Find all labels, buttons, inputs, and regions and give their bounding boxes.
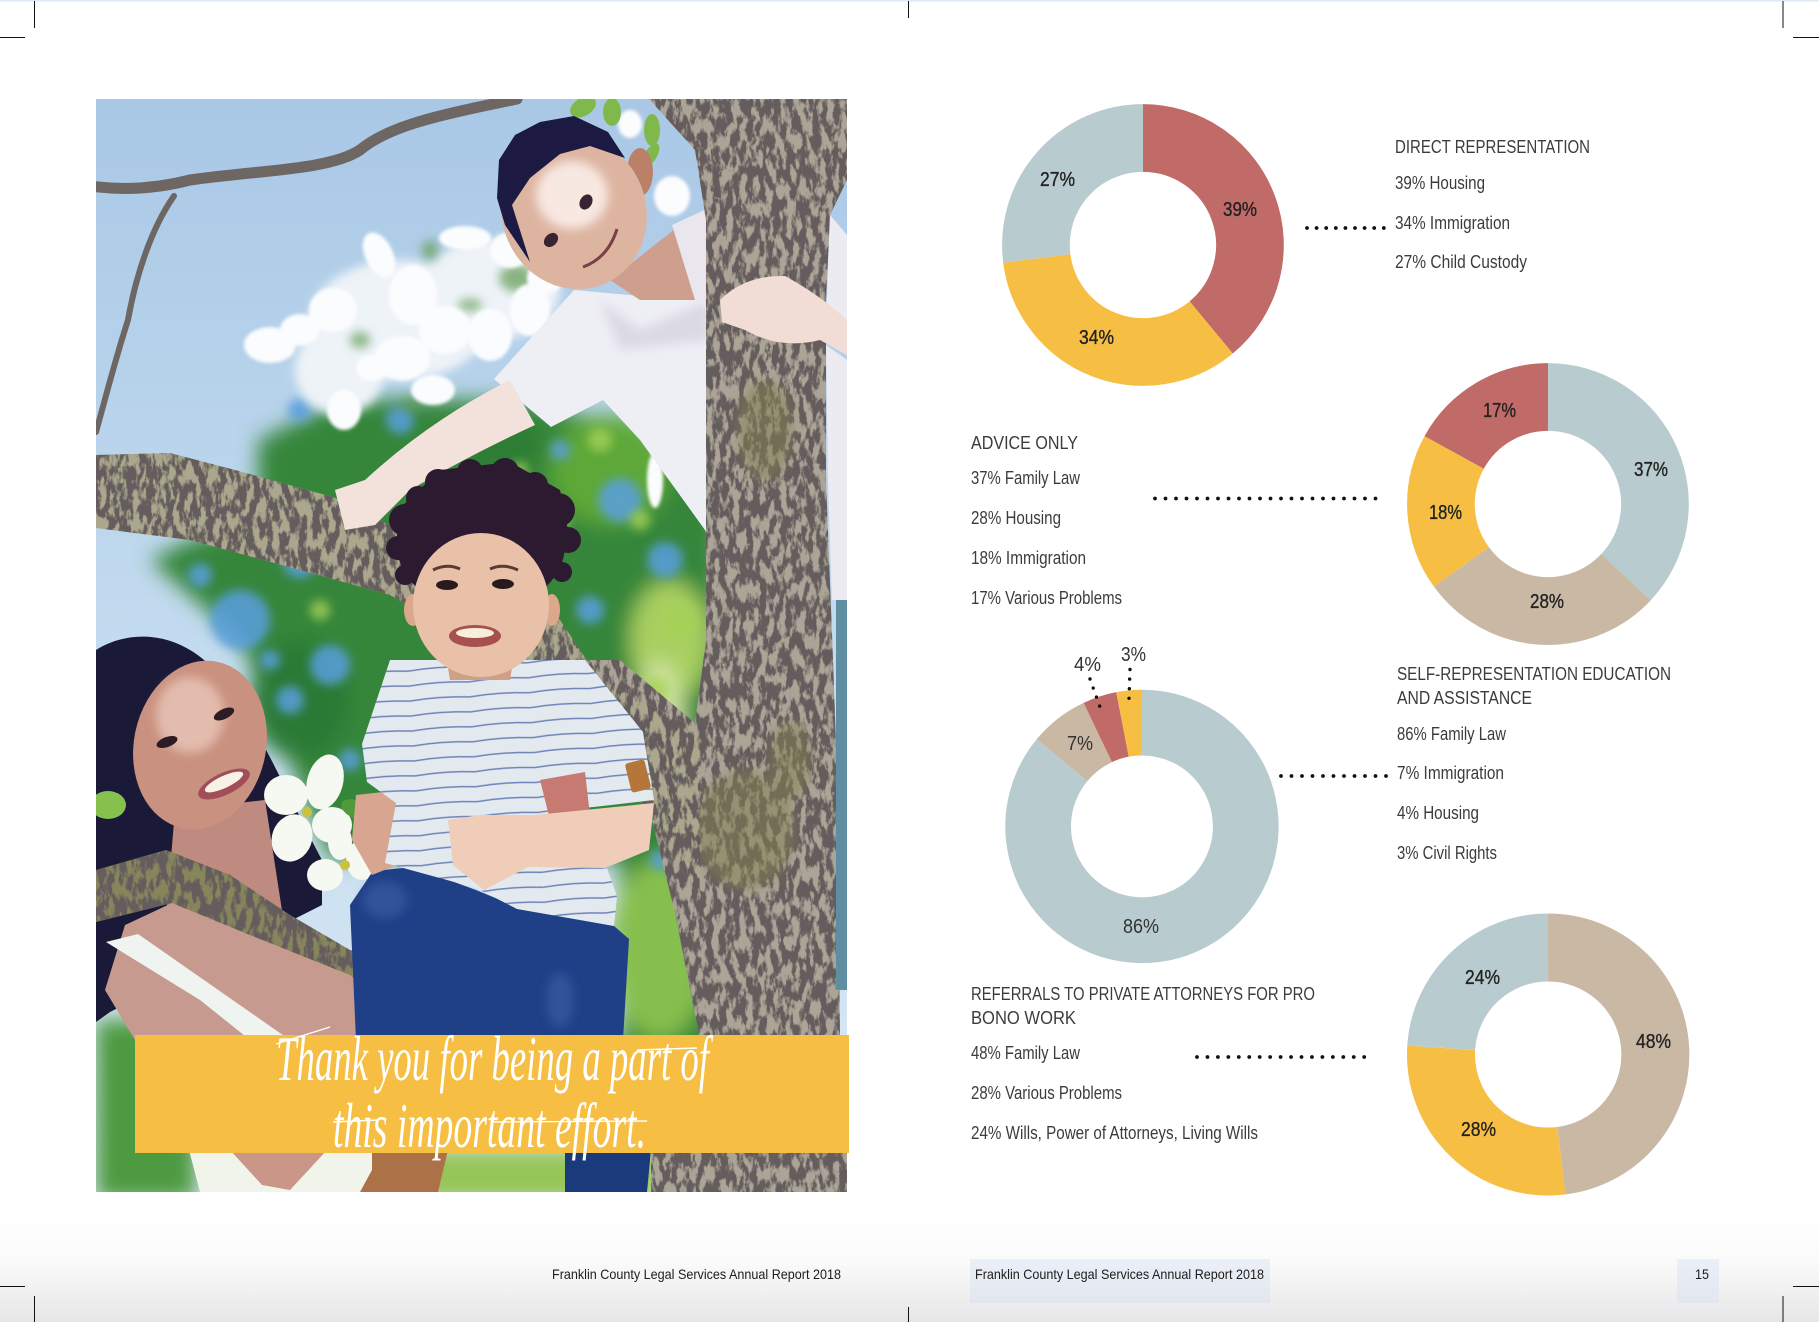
flower centre two: [340, 860, 350, 870]
callout banner: [135, 1023, 849, 1161]
boy: hand on trunk: [720, 276, 847, 355]
text block: direct representation: [1395, 137, 1590, 272]
donut labels: referrals: 48%: [1636, 1031, 1671, 1053]
text block: self-representation: [1397, 664, 1671, 863]
blossom soft mass: [295, 240, 560, 415]
text block: advice only: 28% Housing: [971, 508, 1061, 528]
toddler: arm and hand: [448, 803, 654, 890]
footer text left page: Franklin County Legal Services Annual Report 2018: [552, 1266, 841, 1282]
donut labels: direct representation: 39%: [1223, 199, 1257, 221]
thank-you script line two: this important effort.: [333, 1090, 646, 1161]
script flourishes: [276, 1027, 697, 1122]
toddler: hair: [386, 458, 581, 585]
text block: referrals: BONO WORK: [971, 1008, 1076, 1028]
light green bokeh: [310, 428, 698, 704]
toddler: eyes, brows, mouth: [433, 566, 518, 647]
text block: advice only: ADVICE ONLY: [971, 433, 1078, 453]
text block: self-representation: SELF-REPRESENTATION EDUCATION: [1397, 664, 1671, 684]
leaves near top: [570, 99, 660, 164]
toddler: sleeve tab: [625, 759, 651, 793]
banner rectangle: [135, 1035, 849, 1153]
top edge line: [0, 0, 1819, 2]
footer tab right page: [970, 1259, 1270, 1303]
toddler: pants below banner: [565, 1150, 651, 1192]
donut labels: referrals: 28%: [1461, 1119, 1496, 1141]
donut labels: self-representation: 3%: [1121, 644, 1146, 666]
boy: shirt right of trunk: [826, 215, 847, 600]
donut labels: advice only: 37%: [1634, 459, 1668, 481]
donut labels: advice only: [1429, 400, 1668, 613]
text block: advice only: 18% Immigration: [971, 548, 1086, 568]
text block: advice only: 37% Family Law: [971, 468, 1081, 488]
text block: referrals: 28% Various Problems: [971, 1083, 1122, 1103]
text block: self-representation: 86% Family Law: [1397, 724, 1507, 744]
woman: dress strap: [106, 934, 290, 1040]
woman: chest: [105, 903, 360, 1040]
toddler: far arm: [352, 790, 402, 875]
woman: highlight: [156, 677, 224, 753]
thank-you script line one: Thank you for being a part of: [276, 1023, 714, 1094]
boy: ear: [627, 148, 653, 196]
text block: direct representation: DIRECT REPRESENTATION: [1395, 137, 1590, 157]
donut labels: self-representation: 86%: [1123, 916, 1159, 938]
boy: shirt: [494, 290, 706, 532]
dotted leader three: [1281, 774, 1387, 778]
text block: self-representation: 7% Immigration: [1397, 763, 1504, 783]
boy: hair: [497, 116, 625, 262]
background figure strip at right: [836, 600, 847, 990]
photo: mother and two children in a tree: [90, 92, 847, 1200]
text block: advice only: 17% Various Problems: [971, 588, 1122, 608]
thin branches: [90, 99, 517, 432]
woman: neck: [167, 800, 282, 910]
sky: [96, 99, 847, 1192]
text block: direct representation: 34% Immigration: [1395, 213, 1510, 233]
text block: self-representation: 4% Housing: [1397, 803, 1479, 823]
text block: self-representation: AND ASSISTANCE: [1397, 688, 1532, 708]
dotted leader four: [1197, 1055, 1366, 1059]
lower mossy branch: [96, 850, 525, 1040]
donut labels: self-representation: 4%: [1074, 654, 1101, 676]
toddler: ears: [404, 594, 560, 626]
dotted leader one: [1307, 226, 1386, 230]
woman: eyes, smile: [156, 708, 250, 800]
donut labels: referrals: [1461, 967, 1671, 1141]
donut chart: direct representation: [1036, 138, 1250, 352]
text block: advice only: [971, 433, 1122, 608]
toddler: sandal and foot: [360, 1150, 448, 1192]
text block: direct representation: 39% Housing: [1395, 173, 1485, 193]
dotted leader two: [1155, 497, 1378, 500]
donut labels: direct representation: 27%: [1040, 169, 1075, 191]
text block: referrals: REFERRALS TO PRIVATE ATTORNEYS FOR PRO: [971, 984, 1315, 1004]
leaf at far left: [90, 791, 126, 819]
toddler: hair behind face: [397, 479, 565, 611]
page number tab: 15: [1695, 1266, 1709, 1282]
toddler: face: [413, 533, 549, 677]
woman: arm below banner: [232, 1153, 324, 1190]
toddler: shirt: [362, 660, 654, 926]
text block: self-representation: 3% Civil Rights: [1397, 843, 1497, 863]
page number tab: [1677, 1259, 1719, 1303]
donut chart: advice only: [1441, 397, 1655, 611]
text block: referrals: 48% Family Law: [971, 1043, 1081, 1063]
boy: neck: [611, 230, 695, 300]
donut chart: referrals: [1441, 947, 1655, 1162]
footer tab right page: Franklin County Legal Services Annual Report 2018: [975, 1266, 1264, 1282]
trunk moss: [695, 380, 810, 890]
boy: eyes and smile: [541, 192, 617, 267]
large branch: [96, 453, 700, 900]
boy: face: [501, 146, 647, 290]
leaf: [341, 799, 356, 818]
boy: collar: [672, 210, 706, 300]
toddler: pants: [350, 867, 629, 1040]
text block: referrals: 24% Wills, Power of Attorneys, Living Wills: [971, 1123, 1258, 1143]
flowers: [264, 750, 378, 891]
donut labels: self-representation: [1067, 644, 1159, 938]
flower petals: [264, 750, 378, 891]
tree trunk with bark texture: [585, 99, 847, 1192]
small dotted pointers: [1090, 670, 1130, 707]
boy: arm: [335, 380, 535, 530]
footer gradient band: [0, 1215, 1819, 1322]
donut labels: referrals: 24%: [1465, 967, 1500, 989]
woman: hair: [96, 637, 322, 1022]
flower centres: [302, 807, 312, 817]
donut labels: self-representation: 7%: [1067, 733, 1093, 755]
white blossoms: [244, 110, 690, 508]
donut labels: advice only: 18%: [1429, 502, 1462, 524]
blurred green foliage: [96, 400, 720, 1200]
toddler: pants highlights: [363, 882, 574, 1028]
donut labels: direct representation: 34%: [1079, 327, 1114, 349]
green between blossoms: [350, 240, 535, 411]
donut labels: direct representation: [1040, 169, 1257, 349]
text block: referrals: [971, 984, 1315, 1143]
text block: direct representation: 27% Child Custody: [1395, 252, 1527, 272]
donut labels: advice only: 17%: [1483, 400, 1516, 422]
donut labels: advice only: 28%: [1530, 591, 1564, 613]
woman: face: [133, 660, 267, 829]
boy: face highlight: [536, 161, 608, 229]
mother's hand behind arm: [540, 772, 590, 820]
donut chart: self-representation: [1038, 723, 1246, 930]
woman: dress below banner: [189, 1150, 373, 1192]
boy: shirt shadow: [604, 304, 706, 350]
toddler: neck: [445, 650, 515, 680]
bokeh sky spots: [188, 398, 702, 870]
